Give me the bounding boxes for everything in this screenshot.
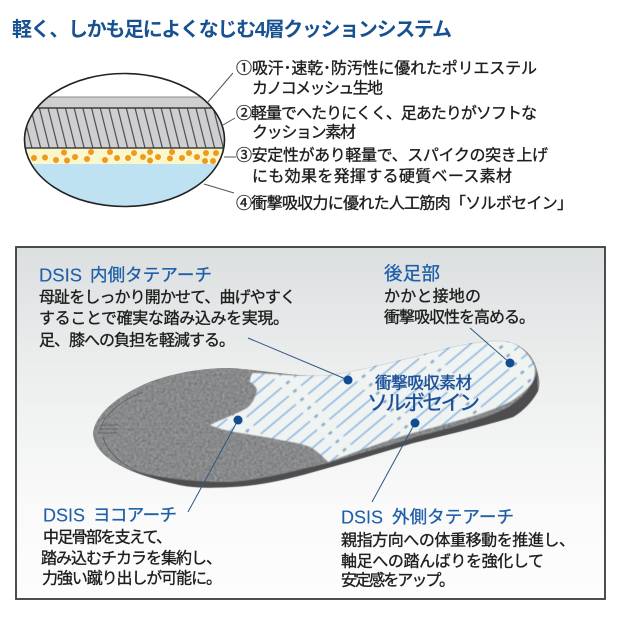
item 1: カノコメッシュ生地 bbox=[252, 80, 383, 98]
layer 1: mesh fabric bbox=[38, 98, 210, 108]
toe stitching bbox=[98, 392, 152, 477]
callout: inner arch bbox=[39, 265, 296, 350]
callout: transverse arch: DSIS bbox=[43, 506, 85, 526]
callout: transverse arch: 中足骨部を支えて、 bbox=[43, 528, 172, 546]
callout: inner arch: することで確実な踏み込みを実現。 bbox=[39, 310, 289, 328]
title: 軽く、しかも足によくなじむ4層クッションシステム bbox=[12, 18, 452, 41]
callout: inner arch: 足、膝への負担を軽減する。 bbox=[39, 332, 235, 350]
callout: inner arch: 内側タテアーチ bbox=[90, 265, 212, 285]
item 4: ④衝撃吸収力に優れた人工筋肉「ソルボセイン」 bbox=[236, 194, 573, 212]
layer 4: blue gel bbox=[32, 164, 217, 206]
callout: heel: かかと接地の bbox=[384, 288, 481, 306]
panel: insole features bbox=[16, 247, 605, 599]
item 2 bbox=[236, 104, 537, 142]
callout: outer arch: 外側タテアーチ bbox=[392, 507, 514, 527]
material label bbox=[367, 374, 480, 415]
callout: heel: 後足部 bbox=[384, 263, 440, 284]
leader lines and dots bbox=[188, 328, 514, 512]
callout: inner arch: 母趾をしっかり開かせて、曲げやすく bbox=[39, 288, 296, 306]
item 3: ③安定性があり軽量で、スパイクの突き上げ bbox=[236, 146, 548, 164]
callout: heel: 衝撃吸収性を高める。 bbox=[384, 308, 535, 326]
dot: heel bbox=[506, 358, 514, 368]
callout: outer arch bbox=[341, 507, 575, 590]
callout: transverse arch bbox=[41, 505, 222, 588]
dot: outer arch bbox=[410, 418, 420, 428]
layer 3: dotted base bbox=[20, 148, 230, 164]
item 1 bbox=[236, 60, 537, 98]
insole illustration bbox=[93, 341, 539, 488]
item 1: ①吸汗･速乾･防汚性に優れたポリエステル bbox=[236, 60, 537, 78]
item 3: にも効果を発揮する硬質ベース素材 bbox=[252, 168, 512, 186]
item 2: クッション素材 bbox=[252, 124, 356, 142]
material label: ソルボセイン bbox=[367, 392, 480, 415]
callout: transverse arch: 踏み込むチカラを集約し、 bbox=[41, 550, 222, 568]
insole outer felt bbox=[93, 341, 539, 488]
callout: outer arch: 軸足への踏んばりを強化して bbox=[341, 552, 544, 570]
item 3 bbox=[236, 146, 548, 186]
dot: inner arch bbox=[344, 376, 352, 384]
item 2: ②軽量でへたりにくく、足あたりがソフトな bbox=[236, 104, 537, 122]
callout: heel bbox=[384, 263, 535, 326]
callout: inner arch: DSIS bbox=[39, 266, 82, 286]
layer description list bbox=[236, 60, 573, 212]
callout: outer arch: DSIS bbox=[341, 508, 383, 528]
insole white Sorbothane panel bbox=[210, 341, 535, 462]
diagram: layer cross-section ellipse bbox=[20, 74, 230, 208]
leader lines for layer list bbox=[204, 73, 236, 193]
dot: transverse arch bbox=[234, 416, 242, 424]
callout: transverse arch: 力強い蹴り出しが可能に。 bbox=[42, 570, 222, 588]
callout: transverse arch: ヨコアーチ bbox=[93, 505, 177, 525]
callout: outer arch: 親指方向への体重移動を推進し、 bbox=[341, 532, 575, 550]
callout: outer arch: 安定感をアップ。 bbox=[341, 572, 455, 590]
layer 2: hatched cushion bbox=[20, 108, 230, 148]
material label: 衝撃吸収素材 bbox=[375, 374, 472, 392]
